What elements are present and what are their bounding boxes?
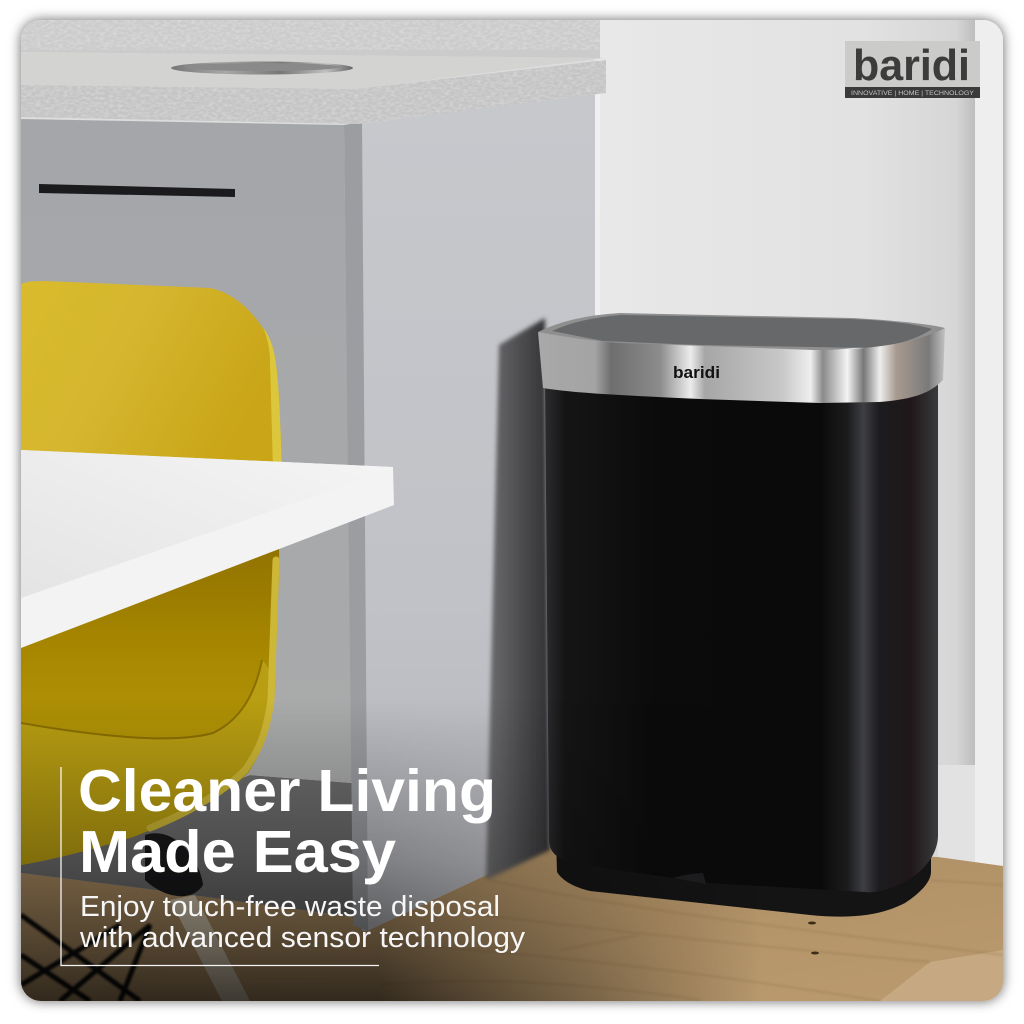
right door frame bbox=[975, 20, 1003, 866]
countertop surface bbox=[21, 52, 605, 89]
wall corner highlight bbox=[596, 94, 600, 314]
drawer handle bbox=[39, 184, 235, 197]
subheading: Enjoy touch-free waste disposal bbox=[80, 891, 500, 923]
logo wordmark: baridi bbox=[853, 41, 970, 90]
chair wooden leg bbox=[170, 895, 250, 1001]
brand logo bbox=[845, 41, 980, 98]
pedal bbox=[673, 873, 706, 884]
bin base bbox=[556, 856, 931, 917]
bin lid bbox=[538, 313, 945, 352]
logo plate bbox=[845, 41, 980, 87]
chair back bbox=[21, 281, 282, 470]
countertop edge bbox=[21, 60, 606, 124]
floor bbox=[21, 846, 1003, 1001]
frame lines bbox=[61, 767, 379, 966]
cabinet front bbox=[21, 119, 352, 783]
logo tagline bar bbox=[845, 87, 980, 98]
chair seat lower bbox=[21, 540, 279, 865]
cabinet end column bbox=[344, 122, 368, 931]
dark text overlay bbox=[21, 720, 737, 1001]
wall bbox=[595, 20, 975, 765]
bin shadow on cabinet bbox=[486, 318, 550, 880]
baseboard bbox=[938, 765, 975, 865]
lid top bbox=[552, 315, 932, 348]
subheading: with advanced sensor technology bbox=[79, 922, 526, 954]
bin logo: baridi bbox=[673, 363, 720, 382]
toe kick bbox=[21, 775, 354, 917]
trash bin bbox=[538, 313, 945, 917]
table bbox=[21, 450, 394, 648]
stone texture bbox=[21, 20, 607, 125]
headline block bbox=[61, 758, 526, 966]
cabinet side panel bbox=[360, 93, 595, 931]
logo tagline: INNOVATIVE | HOME | TECHNOLOGY bbox=[851, 90, 975, 97]
heading: Made Easy bbox=[79, 819, 396, 885]
chair hub bbox=[145, 833, 203, 896]
chair leg wire bbox=[21, 915, 150, 1001]
steel rim bbox=[538, 328, 945, 403]
heading: Cleaner Living bbox=[78, 758, 496, 824]
sink ring bbox=[171, 62, 353, 74]
bin body bbox=[545, 380, 938, 892]
countertop back bbox=[21, 20, 600, 58]
